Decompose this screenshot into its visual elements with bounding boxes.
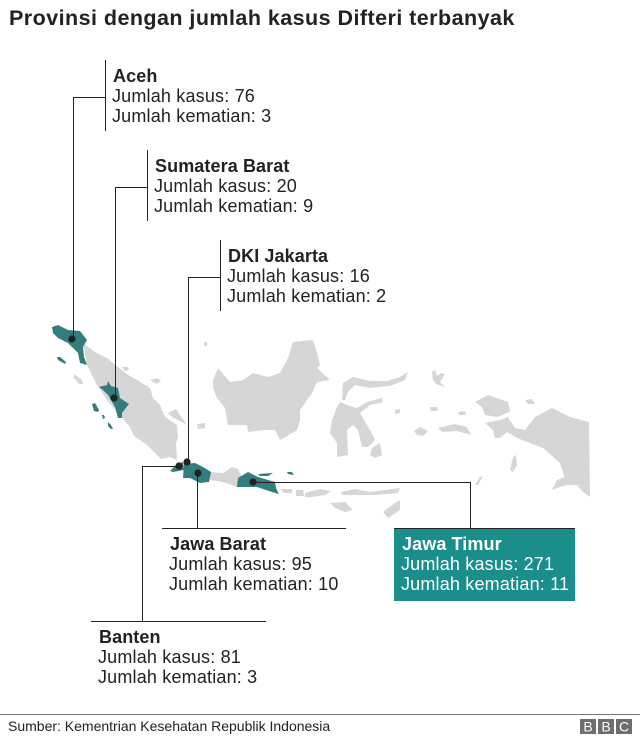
map: DKI and Jawa Barat province [183,463,211,483]
label: Aceh: Aceh [113,66,157,86]
label box: Jawa Timur: Jumlah kematian: 11 [401,574,569,594]
label: Aceh: Jumlah kematian: 3 [112,106,271,126]
label: DKI Jakarta [220,240,386,311]
connector: DKI Jakarta [183,278,220,466]
label: Aceh: Jumlah kasus: 76 [112,86,255,106]
label box: Jawa Timur: Jumlah kasus: 271 [401,554,554,574]
connector: Sumatera Barat [110,188,148,402]
BBC logo [580,718,632,734]
map: Banten province [170,462,184,472]
connector: Banten [142,462,183,621]
map of Indonesia [52,325,590,518]
label: Banten: Jumlah kematian: 3 [98,667,257,687]
connector: Jawa Timur [249,478,470,528]
map: Mentawai islands [92,403,113,429]
label: Aceh [106,60,271,131]
label: Sumatera Barat: Sumatera Barat [155,156,289,176]
label: DKI Jakarta: Jumlah kematian: 2 [227,286,386,306]
connector: Jawa Barat [194,469,202,528]
label: Banten: Jumlah kasus: 81 [98,647,241,667]
label: Jawa Barat: Jumlah kematian: 10 [169,574,339,594]
footer rule [0,714,640,716]
title: Provinsi dengan jumlah kasus Difteri terbanyak [9,6,515,30]
BBC logo: C [619,718,629,734]
label: Sumatera Barat: Jumlah kematian: 9 [154,196,313,216]
map: Jawa Timur province [237,472,279,494]
map: Sumatera Barat province [99,381,129,418]
label: Jawa Barat [162,528,346,594]
source text: Sumber: Kementrian Kesehatan Republik Indonesia [8,718,330,734]
map: Simeulue island [57,357,66,364]
map: small teal islands [287,472,294,475]
map: grey islands [74,340,590,518]
label: DKI Jakarta: DKI Jakarta [228,246,329,266]
map: Aceh province [52,325,87,365]
BBC logo: B [583,718,593,734]
label box: Jawa Timur [394,528,575,601]
label: Sumatera Barat: Jumlah kasus: 20 [154,176,297,196]
label: Sumatera Barat [148,150,313,221]
label box: Jawa Timur: Jawa Timur [402,534,502,554]
connector: Aceh [68,98,106,343]
label: Jawa Barat: Jumlah kasus: 95 [169,554,312,574]
label: Banten: Banten [99,627,161,647]
label: Banten [91,622,266,687]
map: Madura island [258,473,273,476]
label: Jawa Barat: Jawa Barat [170,534,266,554]
label: DKI Jakarta: Jumlah kasus: 16 [227,266,370,286]
BBC logo: B [601,718,611,734]
